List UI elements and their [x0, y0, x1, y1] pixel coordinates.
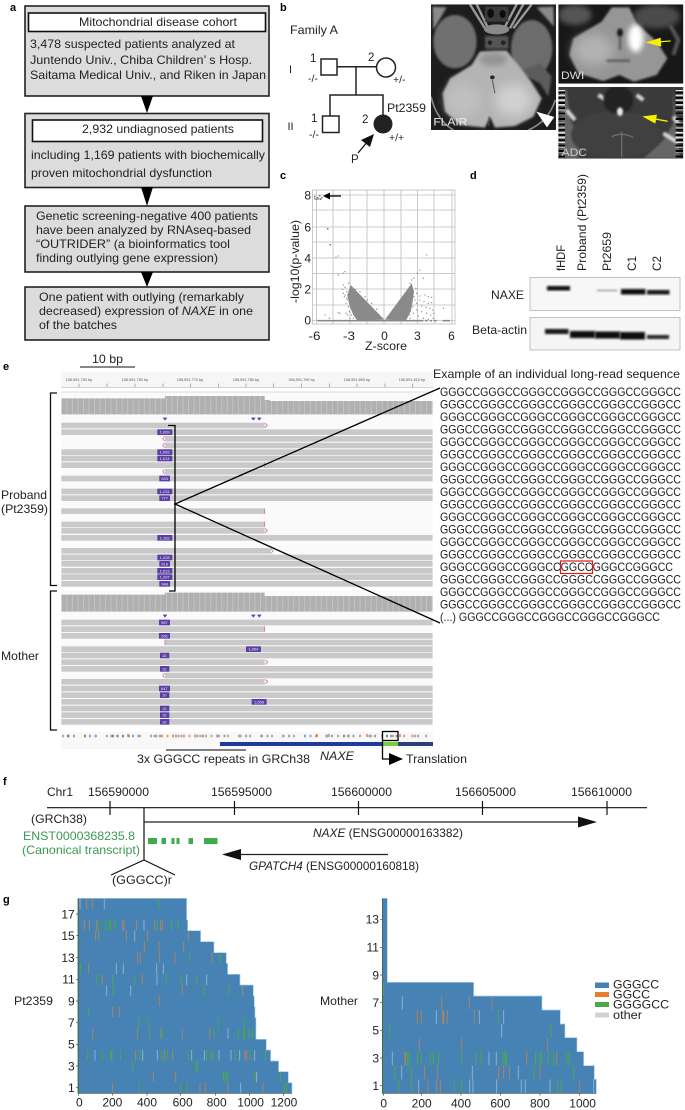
- arrow down 2: [141, 187, 153, 206]
- NAXE blot: [530, 278, 680, 310]
- proband insertion labels: 1,069: [160, 430, 170, 435]
- y axis ticks: 0: [304, 314, 311, 328]
- Mother x labels: 0: [380, 1096, 387, 1110]
- long-read sequence block: [433, 367, 681, 624]
- proband insertion markers: [163, 418, 262, 421]
- panel label e: e: [3, 361, 9, 373]
- Mother axes: [380, 898, 596, 1096]
- mother insertion labels: 987: [161, 620, 168, 625]
- Pt2359 y labels: 7: [68, 1016, 75, 1030]
- Mother y labels: 9: [372, 968, 379, 982]
- mother insertion labels: 10: [162, 719, 167, 724]
- mother label: Mother: [1, 649, 39, 663]
- Mother x labels: [380, 1096, 596, 1110]
- panel label c: c: [280, 170, 286, 182]
- GPATCH4 arrow: [222, 849, 388, 860]
- scatter points: [317, 255, 450, 321]
- pedigree labels: II: [288, 121, 294, 133]
- zoom lines to sequence: [175, 388, 440, 623]
- pedigree labels: Pt2359: [387, 103, 426, 115]
- Pt2359 x labels: 1200: [271, 1096, 298, 1110]
- NAXE gene label: NAXE: [320, 749, 355, 763]
- Pt2359 sample label: Pt2359: [14, 994, 53, 1008]
- panel label f: f: [3, 776, 7, 788]
- flow box 1: Mitochondrial disease cohort: [79, 15, 238, 29]
- mother insertion labels: 847: [161, 686, 168, 691]
- flow box 3: finding outlying gene expression): [36, 251, 218, 265]
- panel a: cohort flowchart: [10, 2, 269, 340]
- FLAIR caption: FLAIR: [433, 117, 467, 129]
- Pt2359 orange stripes: [84, 898, 263, 1093]
- y axis ticks: [304, 188, 311, 328]
- panel label g: g: [3, 894, 10, 906]
- Mother other stripes: [392, 996, 594, 1093]
- flow box 1: Saitama Medical Univ., and Riken in Japan: [30, 68, 266, 82]
- proband symbol: [374, 114, 392, 134]
- proband read rows: [61, 423, 433, 587]
- NAXE tiny label: NAXE: [314, 197, 322, 201]
- legend: GGCC: [613, 988, 650, 1002]
- Mother y labels: 1: [372, 1079, 379, 1093]
- proband insertion labels: [157, 429, 172, 587]
- arrow to NAXE point: [323, 192, 341, 200]
- Mother y labels: 5: [372, 1024, 379, 1038]
- flow box 2: [25, 114, 269, 188]
- flow box 2: 2,932 undiagnosed patients: [82, 122, 234, 136]
- panel g: repeat composition plots: [3, 894, 669, 1110]
- coordinate labels: 156605000: [455, 785, 516, 799]
- flow box 4: decreased) expression of NAXE in one: [39, 304, 253, 318]
- coordinate labels: 156610000: [571, 785, 632, 799]
- red highlight box: [560, 561, 592, 574]
- sibling symbol: [322, 116, 339, 132]
- pedigree labels: 1: [311, 113, 317, 125]
- NAXE gene label: NAXE (ENSG00000163382): [313, 826, 463, 840]
- proband insertion labels: 919: [161, 561, 169, 566]
- Pt2359 y labels: 15: [61, 929, 75, 943]
- flow box 4: [25, 287, 269, 340]
- x axis ticks: 3: [414, 329, 421, 343]
- proband insertion labels: 1,231: [160, 489, 170, 494]
- mother coverage track: [61, 593, 433, 612]
- IGV ruler: 156,591,760 bp: [122, 378, 148, 382]
- Mother y labels: 13: [366, 913, 379, 927]
- plot Pt2359: [61, 898, 298, 1110]
- Pt2359 y labels: 1: [68, 1081, 75, 1095]
- IGV ruler: [61, 372, 433, 392]
- mother symbol: [376, 58, 396, 77]
- panel label b: b: [280, 2, 287, 14]
- GPATCH4 label: GPATCH4 (ENSG00000160818): [249, 859, 419, 873]
- arrowhead on FLAIR: [536, 112, 554, 127]
- Mother x labels: 1000: [569, 1096, 596, 1110]
- DWI caption: DWI: [561, 70, 584, 82]
- pedigree labels: [288, 52, 426, 166]
- lane labels: C2: [650, 256, 664, 271]
- mother insertion markers: [163, 615, 262, 618]
- Pt2359 y labels: 13: [61, 951, 75, 965]
- coordinate labels: 156600000: [331, 785, 392, 799]
- y axis title: -log10(p-value): [288, 220, 302, 303]
- flow box 4: One patient with outlying (remarkably: [39, 290, 244, 304]
- mother insertion labels: 10: [162, 693, 167, 698]
- repeat caption: 3x GGGCC repeats in GRCh38: [137, 752, 310, 766]
- y axis ticks: 4: [304, 252, 311, 266]
- mother insertion labels: 265: [161, 633, 168, 638]
- proband insertion labels: 1,163: [160, 535, 170, 540]
- Pt2359 y labels: 9: [68, 994, 75, 1008]
- Mother sample label: Mother: [320, 994, 358, 1008]
- pedigree lines: [330, 67, 383, 116]
- translation label: Translation: [406, 752, 467, 766]
- panel b: pedigree: [280, 2, 426, 166]
- Pt2359 other stripes: [80, 898, 257, 1093]
- sequence title: Example of an individual long-read sequence: [433, 367, 680, 381]
- start codon box: [382, 732, 398, 740]
- proband coverage track: [61, 396, 433, 414]
- mother insertion labels: 10: [162, 706, 167, 711]
- pedigree labels: 1: [310, 53, 316, 65]
- IGV ruler: 156,591,800 bp: [344, 378, 370, 382]
- proband clipping marks: [163, 423, 273, 553]
- proband insertion labels: 948: [161, 581, 169, 586]
- IGV ruler: 156,591,810 bp: [399, 378, 425, 382]
- mother insertion labels: 10: [162, 666, 167, 671]
- x axis ticks: -3: [343, 329, 355, 343]
- Mother read bars: [382, 898, 596, 1093]
- scale bar: [80, 352, 135, 367]
- repeat region bracket: [168, 426, 175, 591]
- proband insertion labels: 1,083: [160, 450, 170, 455]
- IGV ruler: 156,591,770 bp: [177, 378, 203, 382]
- flow box 1: Juntendo Univ., Chiba Children’ s Hosp.: [30, 53, 252, 67]
- Mother x labels: 200: [412, 1096, 432, 1110]
- Pt2359 x labels: 0: [76, 1096, 83, 1110]
- Pt2359 axes: [76, 898, 292, 1096]
- mother reads: [61, 590, 433, 727]
- coordinate labels: [31, 785, 632, 826]
- lane labels: Pt2659: [600, 232, 614, 271]
- family title: Family A: [290, 23, 338, 37]
- MRI images: [431, 4, 683, 159]
- Pt2359 x labels: 600: [173, 1096, 193, 1110]
- lane labels: [554, 174, 664, 271]
- proband label: Proband: [1, 488, 47, 502]
- repeat label: (GGGCC)r: [112, 873, 172, 887]
- scale bar: 10 bp: [92, 352, 123, 366]
- mother clipping marks: [163, 626, 268, 684]
- y axis ticks: 2: [304, 282, 311, 296]
- Pt2359 x labels: 400: [137, 1096, 157, 1110]
- flow box 1: [25, 6, 269, 96]
- NAXE arrow: [144, 816, 597, 828]
- repeat underline: [166, 749, 246, 751]
- Mother green stripes: [383, 982, 574, 1093]
- pedigree labels: -/-: [308, 73, 318, 85]
- panel label a: a: [10, 2, 17, 14]
- ADC caption: ADC: [562, 147, 587, 159]
- Pt2359 y labels: 5: [68, 1038, 75, 1052]
- IGV ruler: 156,591,790 bp: [288, 378, 315, 382]
- coordinate labels: 156595000: [211, 785, 272, 799]
- legend: GGGGCC: [613, 998, 669, 1012]
- IGV ruler: 156,591,780 bp: [233, 378, 259, 382]
- ADC yellow arrow: [642, 115, 668, 124]
- Pt2359 y labels: 17: [61, 907, 75, 921]
- Pt2359 y labels: 11: [62, 973, 75, 987]
- beta-actin row label: Beta-actin: [472, 323, 527, 337]
- pedigree labels: -/-: [309, 129, 319, 141]
- legend: other: [613, 1008, 642, 1022]
- plot Mother: [366, 898, 596, 1110]
- proband reads: [61, 393, 433, 588]
- pedigree labels: P: [351, 154, 359, 166]
- pedigree labels: +/+: [389, 132, 404, 144]
- Pt2359 x labels: [76, 1096, 298, 1110]
- MRI DWI: [558, 4, 683, 84]
- Mother orange stripes: [405, 996, 580, 1093]
- MRI FLAIR: [431, 4, 556, 130]
- reference sequence track: [61, 732, 433, 749]
- Mother y labels: [366, 913, 379, 1093]
- proband bracket: [50, 393, 57, 586]
- IGV ruler: 156,591,750 bp: [66, 378, 92, 382]
- x axis ticks: -6: [308, 329, 321, 343]
- Mother y labels: 7: [372, 996, 379, 1010]
- panel d: western blot: [470, 170, 680, 350]
- legend: [595, 978, 669, 1022]
- x axis ticks: [308, 329, 455, 343]
- x axis title: Z-score: [365, 339, 407, 353]
- transcript exons: [148, 838, 218, 844]
- top outlier points: [314, 195, 331, 246]
- beta-actin blot: [530, 318, 680, 350]
- proband label: (Pt2359): [1, 502, 48, 516]
- proband label: [1, 488, 48, 516]
- arrow down 3: [141, 272, 153, 287]
- father symbol: [321, 59, 337, 75]
- proband insertion labels: 1,207: [160, 575, 170, 580]
- mother insertion labels: 1,064: [248, 647, 259, 652]
- proband insertion labels: 1,014: [160, 456, 170, 461]
- plot frame: [312, 190, 455, 324]
- translation arrow: [382, 741, 403, 765]
- pedigree labels: +/-: [393, 74, 406, 86]
- panel c: volcano plot: [280, 170, 455, 353]
- Pt2359 x labels: 200: [102, 1096, 123, 1110]
- flow box 2: proven mitochondrial dysfunction: [31, 166, 212, 180]
- mother bracket: [50, 591, 57, 730]
- proband arrow: [358, 134, 374, 153]
- chromosome axis: [47, 801, 647, 815]
- flow box 3: “OUTRIDER” (a bioinformatics tool: [36, 237, 230, 251]
- flow box 3: [25, 206, 269, 272]
- Pt2359 y labels: 3: [68, 1059, 75, 1073]
- Mother y labels: 3: [372, 1051, 379, 1065]
- lane labels: Proband (Pt2359): [575, 174, 589, 271]
- coordinate labels: Chr1: [47, 785, 73, 799]
- repeat locus line: [143, 808, 145, 860]
- repeat splay lines: [111, 860, 175, 875]
- flow box 2: including 1,169 patients with biochemically: [31, 148, 265, 162]
- arrow down 1: [141, 96, 153, 113]
- Pt2359 y labels: [61, 907, 75, 1095]
- Mother x labels: 800: [530, 1096, 550, 1110]
- mother insertion labels: [159, 620, 267, 725]
- mother insertion labels: 10: [162, 653, 167, 658]
- Pt2359 x labels: 1000: [237, 1096, 264, 1110]
- flow box 1: 3,478 suspected patients analyzed at: [30, 37, 236, 51]
- transcript label: (Canonical transcript): [22, 843, 140, 857]
- sequence lines: (...) GGGCCGGGCCGGGCCGGGCCGGGCC: [440, 610, 660, 624]
- panel f: genomic locus: [3, 776, 647, 887]
- Pt2359 read bars: [78, 898, 292, 1093]
- NAXE row label: NAXE: [491, 288, 524, 302]
- flow box 4: of the batches: [39, 318, 117, 332]
- mother read rows: [61, 620, 433, 725]
- pedigree labels: 2: [368, 52, 374, 64]
- sequence lines: [440, 385, 681, 624]
- proband insertion labels: 633: [161, 476, 169, 481]
- NAXE gene model: [220, 742, 433, 746]
- coordinate labels: 156590000: [88, 785, 149, 799]
- y axis ticks: 6: [304, 220, 311, 234]
- x axis ticks: 0: [381, 329, 388, 343]
- transcript label: [22, 829, 140, 857]
- proband insertion labels: 1,028: [160, 555, 170, 560]
- x axis ticks: 6: [448, 329, 455, 343]
- flow box 3: have been analyzed by RNAseq-based: [36, 223, 251, 237]
- pedigree labels: 2: [362, 114, 368, 126]
- mother insertion labels: 10: [162, 713, 167, 718]
- panel e: IGV read alignment: [1, 352, 681, 766]
- transcript label: ENST0000368235.8: [23, 829, 135, 843]
- panel label d: d: [470, 170, 477, 182]
- Mother y labels: 11: [367, 941, 379, 955]
- DWI yellow arrow: [646, 38, 671, 47]
- proband insertion labels: 1,013: [160, 568, 170, 573]
- Mother x labels: 400: [451, 1096, 471, 1110]
- Pt2359 x labels: 800: [207, 1096, 227, 1110]
- proband insertion labels: 777: [161, 496, 169, 501]
- Mother x labels: 600: [490, 1096, 511, 1110]
- lane labels: fHDF: [554, 245, 568, 271]
- pedigree labels: I: [289, 64, 292, 76]
- mother insertion labels: 1,058: [254, 699, 265, 704]
- plot grid: [312, 190, 455, 324]
- y axis ticks: 8: [304, 188, 311, 202]
- lane labels: C1: [625, 256, 639, 271]
- MRI ADC: [558, 86, 683, 159]
- Pt2359 green stripes: [78, 898, 287, 1093]
- legend: GGGCC: [613, 978, 659, 992]
- coordinate labels: (GRCh38): [31, 812, 87, 826]
- flow box 3: Genetic screening-negative 400 patients: [36, 209, 258, 223]
